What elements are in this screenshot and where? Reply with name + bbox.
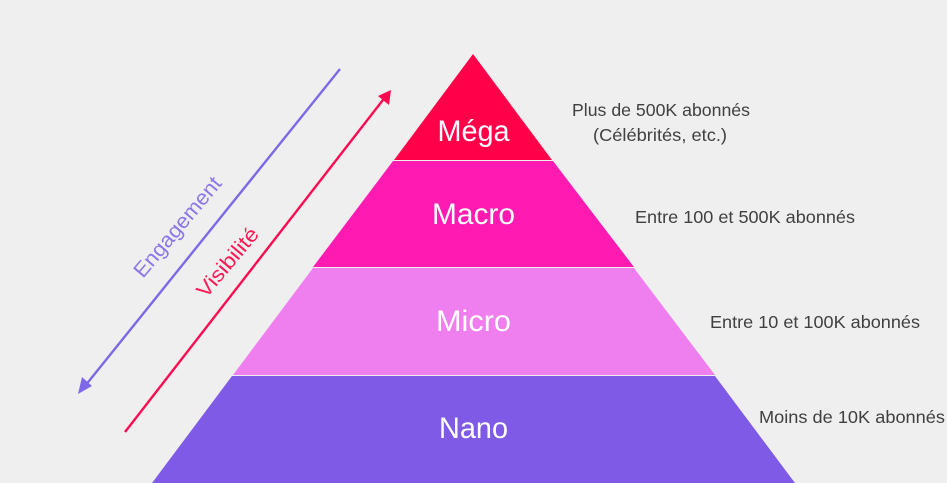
- description: Méga: [572, 100, 750, 145]
- arrow: Visibilité: [125, 90, 391, 432]
- arrow: Engagement: [78, 69, 340, 394]
- tier: Nano: Nano: [439, 412, 508, 445]
- description: Méga: (Célébrités, etc.): [593, 125, 727, 145]
- tier: Nano: [152, 376, 795, 483]
- tier: Méga: Méga: [438, 115, 510, 148]
- description: Micro: Entre 10 et 100K abonnés: [710, 312, 920, 332]
- tier: Macro: Macro: [432, 198, 515, 231]
- label: Visibilité: Visibilité: [192, 223, 264, 302]
- tier: Micro: Micro: [436, 305, 511, 338]
- tier: Méga: [394, 54, 552, 160]
- description: Macro: Entre 100 et 500K abonnés: [635, 207, 855, 227]
- label: Engagement: Engagement: [129, 172, 227, 282]
- description: Méga: Plus de 500K abonnés: [572, 100, 750, 120]
- tier: Micro: [233, 268, 715, 375]
- tier: Macro: [313, 161, 634, 267]
- description: Nano: Moins de 10K abonnés: [759, 407, 945, 427]
- pyramid: [152, 54, 795, 483]
